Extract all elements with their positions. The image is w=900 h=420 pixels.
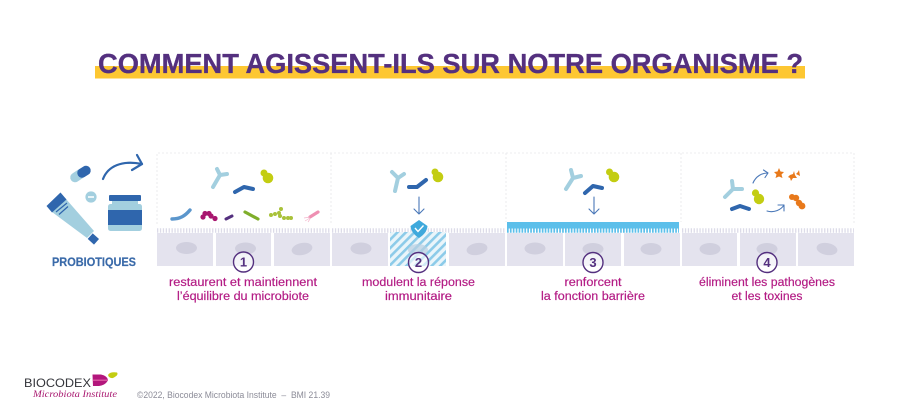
number 4 <box>757 252 777 272</box>
number 4: 4 <box>763 255 771 270</box>
caption 4 <box>699 277 835 303</box>
arrow down <box>589 197 599 214</box>
copyright: ©2022, Biocodex Microbiota Institute – BMI 21.39 <box>137 390 330 400</box>
caption 3 <box>541 277 645 303</box>
title: COMMENT AGISSENT-ILS SUR NOTRE ORGANISME ? <box>98 48 803 79</box>
barrier <box>507 222 679 230</box>
arrow down <box>414 197 424 214</box>
number 3: 3 <box>589 255 597 270</box>
icon: tube <box>46 192 99 245</box>
arrow: probiotics to panels <box>103 155 142 179</box>
caption 2 <box>362 277 475 303</box>
caption 1: restaurent et maintiennent <box>169 277 318 289</box>
arrows <box>753 170 784 212</box>
microbes <box>566 168 619 193</box>
number 1 <box>234 252 254 272</box>
logo: Biocodex Microbiota Institute <box>24 372 118 400</box>
caption 2: immunitaire <box>385 291 452 303</box>
microbes <box>392 168 443 191</box>
panel 4: eliminent <box>682 168 854 303</box>
icon: jar <box>108 195 142 231</box>
epithelial cells <box>157 230 330 266</box>
microbes <box>172 169 318 222</box>
caption 3: renforcent <box>564 277 622 289</box>
number 2 <box>408 252 428 272</box>
epithelial cells <box>507 233 680 266</box>
number 1: 1 <box>240 254 247 270</box>
caption 3: la fonction barrière <box>541 291 645 303</box>
panel 1: restaurent <box>157 169 330 303</box>
caption 4: et les toxines <box>732 291 803 303</box>
caption 1 <box>169 277 318 303</box>
microbes <box>725 181 764 209</box>
epithelial cells <box>682 230 854 266</box>
caption 4: éliminent les pathogènes <box>699 277 835 289</box>
panel 3: renforcent <box>507 168 680 303</box>
icon: check badge <box>410 220 428 238</box>
logo: Biocodex Microbiota Institute: BIOCODEX <box>24 378 91 390</box>
number 3 <box>583 252 603 272</box>
icon: pill <box>85 191 97 203</box>
epithelial cells <box>332 230 505 266</box>
number 2: 2 <box>415 255 422 270</box>
icon: capsule <box>75 170 86 178</box>
label: probiotiques: PROBIOTIQUES <box>52 257 136 269</box>
caption 1: l’équilibre du microbiote <box>177 291 309 303</box>
panel 2: modulent <box>332 168 505 303</box>
logo: Biocodex Microbiota Institute: Microbiota Institute <box>32 390 117 400</box>
dashed panel frames <box>157 153 854 224</box>
panel: probiotiques <box>46 155 142 269</box>
caption 2: modulent la réponse <box>362 277 475 289</box>
pathogens and toxins <box>774 168 805 209</box>
